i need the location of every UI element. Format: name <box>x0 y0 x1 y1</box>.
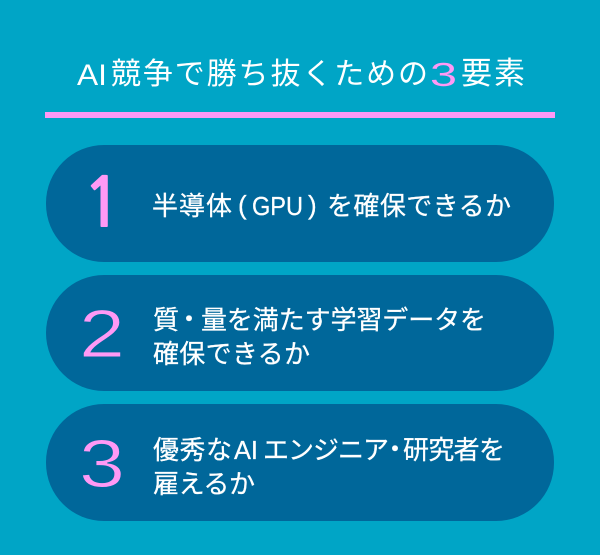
text: item 1: GPU <box>252 191 303 221</box>
number 1: 1 <box>82 171 123 238</box>
number 3: 3 <box>79 426 125 502</box>
text: item 3: 雇えるか <box>153 469 255 499</box>
text: item 2: 量を満たす学習データを <box>201 305 486 335</box>
text: item 1: ( <box>238 190 247 220</box>
panel: item 2 <box>46 275 554 391</box>
text: item 3: 優秀な <box>153 435 232 465</box>
panel: item 1 <box>46 145 554 262</box>
title underline <box>45 112 555 118</box>
text: item 1 <box>152 190 511 221</box>
text: item 3: ・ <box>382 434 408 464</box>
text: item 2 <box>153 304 486 369</box>
title: 競争で勝ち抜くための <box>111 58 428 91</box>
text: item 3 <box>153 434 505 499</box>
text: item 3: エンジニア <box>263 435 389 465</box>
title: 要素 <box>461 56 525 91</box>
text: item 1: を確保できるか <box>327 191 511 221</box>
title: AI <box>77 59 107 92</box>
number 2: 2 <box>79 296 125 372</box>
text: item 1: ) <box>308 190 317 220</box>
text: item 3: AI <box>234 435 258 465</box>
text: item 2: 質 <box>153 305 179 335</box>
text: item 1: 半導体 <box>152 191 232 221</box>
text: item 2: ・ <box>176 304 202 334</box>
text: item 3: 研究者を <box>403 435 505 465</box>
title: 3 <box>430 56 457 93</box>
panel: item 3 <box>46 404 554 521</box>
text: item 2: 確保できるか <box>153 339 310 369</box>
title <box>77 56 525 93</box>
